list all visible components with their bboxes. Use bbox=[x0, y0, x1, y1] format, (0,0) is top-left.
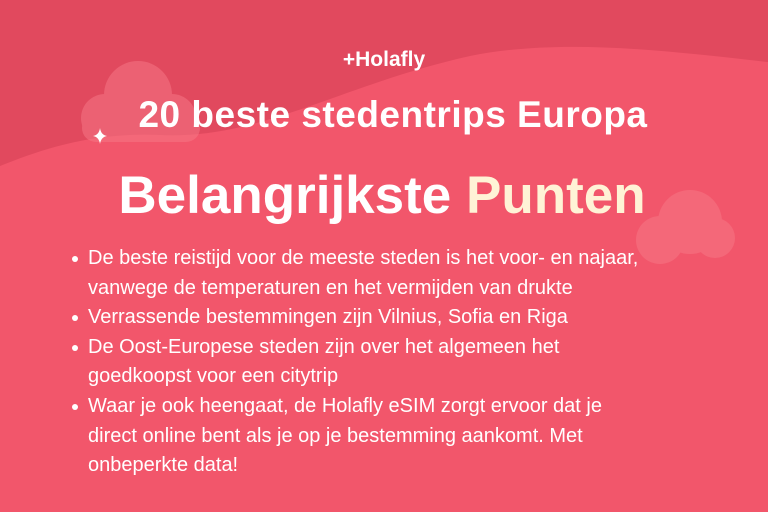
bullet list: vanwege de temperaturen en het vermijden van drukte bbox=[88, 277, 573, 299]
bullet list: onbeperkte data! bbox=[88, 454, 238, 476]
bullet list bbox=[72, 247, 638, 476]
bullet list: goedkoopst voor een citytrip bbox=[88, 365, 338, 387]
bullet list: De Oost-Europese steden zijn over het algemeen het bbox=[88, 336, 559, 358]
bullet list: De beste reistijd voor de meeste steden is het voor- en najaar, bbox=[88, 247, 638, 269]
cloud left bbox=[81, 61, 200, 142]
bullet list: Verrassende bestemmingen zijn Vilnius, Sofia en Riga bbox=[88, 306, 568, 328]
logo: +Holafly bbox=[343, 48, 425, 71]
bullet list: Waar je ook heengaat, de Holafly eSIM zorgt ervoor dat je bbox=[88, 395, 602, 417]
heading: Belangrijkste Punten bbox=[118, 166, 646, 225]
icon: sparkle bbox=[93, 128, 107, 144]
cloud right bbox=[636, 190, 735, 264]
bullet list: direct online bent als je op je bestemming aankomt. Met bbox=[88, 425, 583, 447]
title: 20 beste stedentrips Europa bbox=[138, 94, 648, 135]
